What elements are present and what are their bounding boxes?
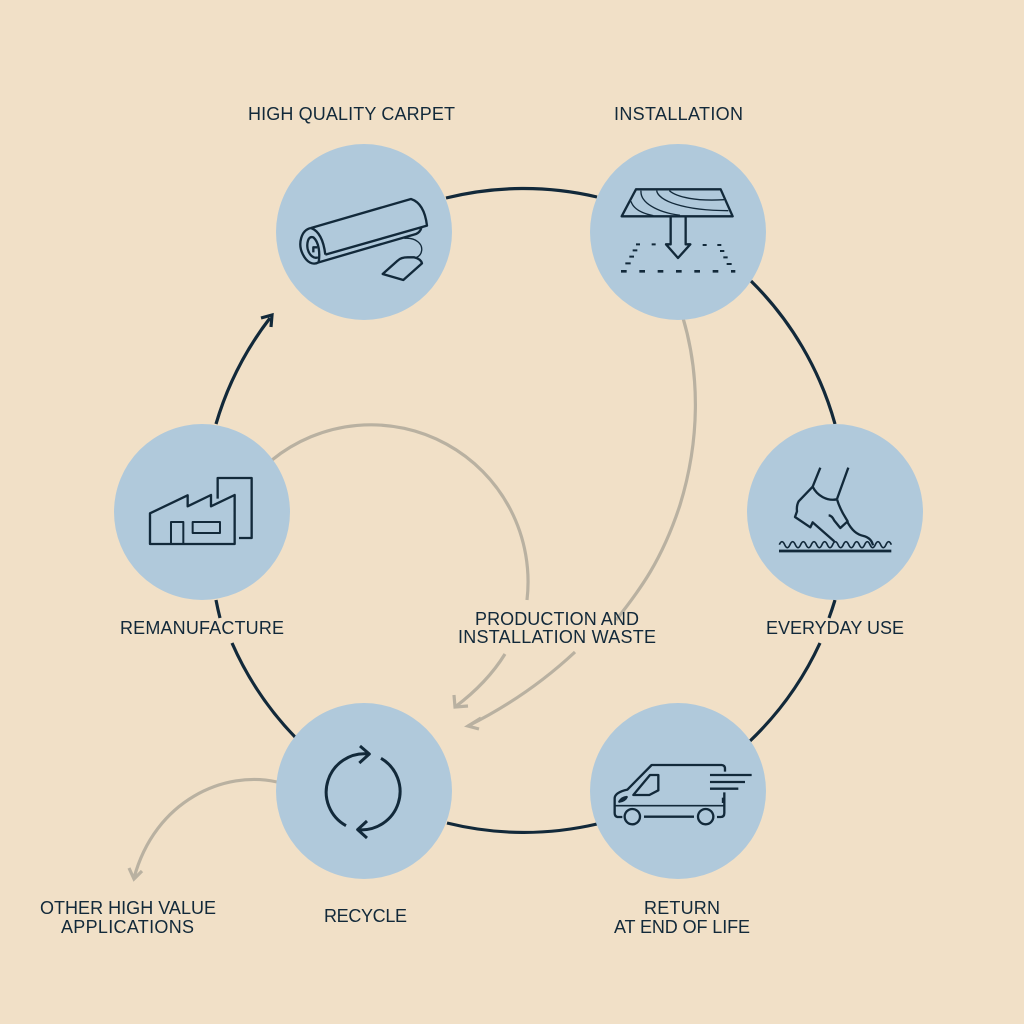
label: HIGH QUALITY CARPET [248,104,455,124]
icon: carpet roll [300,199,427,280]
icon: delivery van [615,765,752,824]
text: other high value applications: APPLICATIONS [61,917,194,937]
label: EVERYDAY USE [766,618,904,638]
panel: recycle [276,703,452,926]
panel: everyday use [747,424,923,638]
node circle [276,144,452,320]
text: production and installation waste [458,609,656,647]
label: INSTALLATION [614,104,743,124]
arrow: installation waste [468,318,695,729]
node circle [590,703,766,879]
arrow: production waste [272,425,528,707]
label: RECYCLE [324,906,407,926]
panel: remanufacture [114,424,290,638]
label line two: AT END OF LIFE [614,917,750,937]
icon: factory [150,478,252,544]
icon: flooring plank dropping into place [621,189,735,271]
text: production and installation waste: INSTALLATION WASTE [458,627,656,647]
node circle [590,144,766,320]
text: other high value applications: OTHER HIGH VALUE [40,898,216,918]
panel: installation [590,104,766,320]
text: other high value applications [40,898,216,937]
panel: high quality carpet [248,104,455,320]
circular flow ring with arrow [216,189,835,832]
panel: return at end of life [590,703,766,937]
icon: foot on carpet [779,468,891,551]
node circle [276,703,452,879]
label: RETURN [644,898,720,918]
arrow: other high value applications [129,779,277,879]
label: REMANUFACTURE [120,618,284,638]
icon: recycling arrows [326,746,400,838]
text: production and installation waste: PRODUCTION AND [475,609,639,629]
node circle [747,424,923,600]
node circle [114,424,290,600]
